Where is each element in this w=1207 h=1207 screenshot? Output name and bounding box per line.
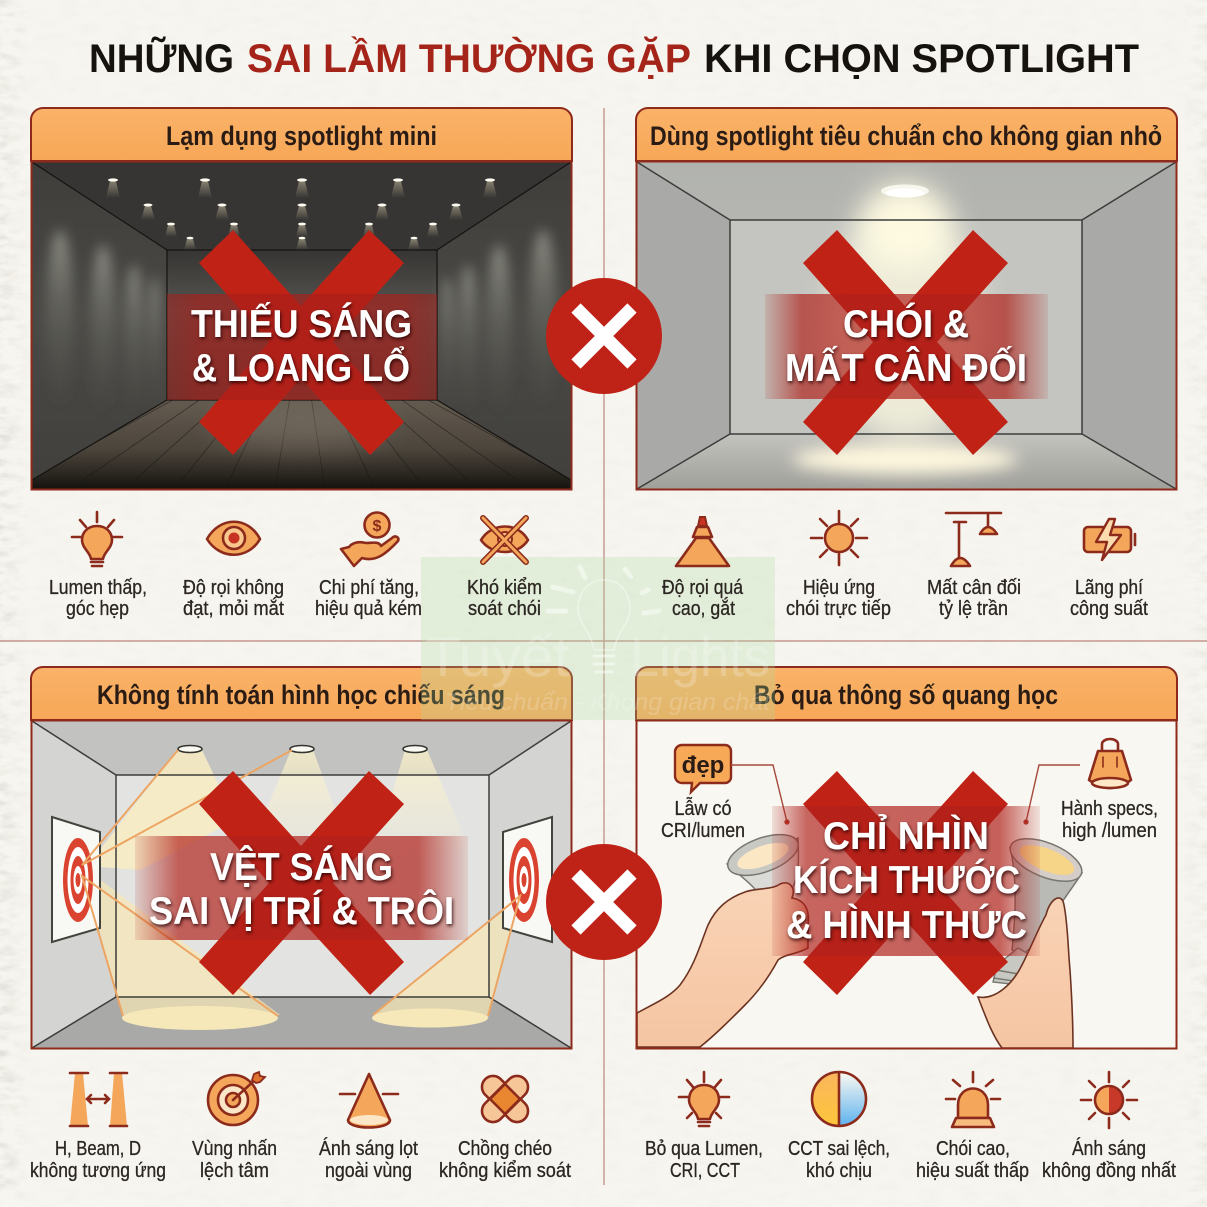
caption: CCT sai lệch: CCT sai lệch, xyxy=(788,1138,890,1160)
caption: Vùng nhấn: lệch tâm xyxy=(200,1160,269,1182)
caption: Lãng phí xyxy=(1070,577,1148,620)
caption: H, Beam, D xyxy=(30,1138,166,1182)
caption: Ánh sáng không đồng nhất: không đồng nhất xyxy=(1042,1160,1176,1182)
icon: pendant lamp xyxy=(1089,739,1131,788)
title: KHI CHỌN SPOTLIGHT xyxy=(704,37,1139,81)
left hand xyxy=(637,883,808,1047)
caption: CCT sai lệch: khó chịu xyxy=(806,1160,872,1182)
title: NHỮNG xyxy=(89,35,234,81)
callout: speech bubble đẹp xyxy=(675,745,731,792)
caption: H, Beam, D: không tương ứng xyxy=(30,1160,166,1182)
icon: H beam D xyxy=(70,1073,127,1126)
caption: Mất cân đối: tỷ lệ trần xyxy=(939,598,1008,620)
overlay band xyxy=(135,836,468,940)
caption: Độ rọi quá cao xyxy=(662,577,744,620)
heading: Lạm dụng spotlight mini xyxy=(31,108,572,161)
icon: target with arrow xyxy=(208,1072,265,1125)
icon row 2: left xyxy=(30,1071,571,1182)
overlay text: THIẾU SÁNG & LOANG LỔ: & LOANG LỔ xyxy=(192,345,410,390)
caption: Chi phí tăng: Chi phí tăng, xyxy=(319,577,419,599)
caption left: Lẫw có xyxy=(674,797,732,820)
caption right xyxy=(1061,798,1158,842)
caption: Ánh sáng lọt: Ánh sáng lọt xyxy=(319,1137,418,1160)
overlay text: VỆT SÁNG / SAI VỊ TRÍ & TRÔI: VỆT SÁNG xyxy=(210,845,393,889)
caption: Hiệu ứng chói xyxy=(786,577,891,620)
ceiling downlights xyxy=(178,746,427,752)
overlay text: THIẾU SÁNG & LOANG LỔ xyxy=(191,302,412,390)
icon: CCT split circle xyxy=(812,1072,866,1126)
overlay text: CHỈ NHÌN KÍCH THƯỚC & HÌNH THỨC xyxy=(786,814,1027,947)
heading: Không tính toán hình học chiếu sáng: Không tính toán hình học chiếu sáng xyxy=(97,680,505,710)
icon: light bulb xyxy=(72,512,122,566)
overlay text: CHÓI & MẤT CÂN ĐỐI: MẤT CÂN ĐỐI xyxy=(785,345,1027,390)
caption: Khó kiểm soát chói: Khó kiểm xyxy=(467,577,542,599)
caption: H, Beam, D: H, Beam, D xyxy=(55,1138,141,1160)
watermark: Lights xyxy=(630,625,770,688)
overlay text: CHÓI & MẤT CÂN ĐỐI: CHÓI & xyxy=(843,302,969,346)
icon: cone with arrows xyxy=(340,1074,398,1128)
overlay text: VỆT SÁNG / SAI VỊ TRÍ & TRÔI xyxy=(149,845,454,933)
caption: CCT sai lệch xyxy=(788,1138,890,1182)
icon row 2: right xyxy=(645,1072,1176,1182)
big red X xyxy=(199,771,404,995)
caption: Bỏ qua Lumen xyxy=(645,1138,763,1182)
caption: Mất cân đối: Mất cân đối xyxy=(927,577,1021,599)
illustration: room with misplaced beams xyxy=(32,721,571,1048)
panel: ignoring optical specs xyxy=(636,667,1177,1048)
watermark: Tiêu chuẩn - Không gian chất xyxy=(445,689,771,716)
icon: battery and bolt xyxy=(1084,519,1135,560)
overlay text: VỆT SÁNG / SAI VỊ TRÍ & TRÔI: SAI VỊ TRÍ & TRÔI xyxy=(149,888,454,933)
right hand xyxy=(978,898,1073,1048)
overlay text: CHỈ NHÌN KÍCH THƯỚC & HÌNH THỨC: & HÌNH THỨC xyxy=(786,903,1027,947)
right bulb xyxy=(993,830,1088,985)
overlay band xyxy=(772,806,1040,956)
caption: Ánh sáng lọt: ngoài vùng xyxy=(325,1160,412,1182)
caption left xyxy=(661,797,745,842)
caption: Ánh sáng không đồng nhất: Ánh sáng xyxy=(1072,1137,1146,1160)
panel: overuse of mini spotlights xyxy=(30,107,573,490)
caption: Vùng nhấn xyxy=(192,1138,277,1182)
icon: beam cone xyxy=(676,517,729,566)
icon: sun xyxy=(811,511,867,565)
icon: coin and hand xyxy=(341,512,398,566)
overlay text: CHỈ NHÌN KÍCH THƯỚC & HÌNH THỨC: KÍCH THƯỚC xyxy=(793,858,1020,902)
caption: Độ rọi không: đạt, mỏi mắt xyxy=(183,597,284,620)
caption: Chói cao: hiệu suất thấp xyxy=(916,1160,1029,1182)
left bulb xyxy=(722,826,804,902)
caption: Độ rọi không: Độ rọi không xyxy=(183,577,284,599)
heading: Không tính toán hình học chiếu sáng xyxy=(31,667,572,720)
icon: eye xyxy=(207,522,260,555)
caption: Ánh sáng lọt xyxy=(319,1137,418,1182)
caption: Chi phí tăng xyxy=(315,577,422,620)
illustration: dark room with small spotlights xyxy=(32,162,570,488)
caption: Bỏ qua Lumen: CRI, CCT xyxy=(670,1160,740,1182)
title xyxy=(89,35,1139,81)
caption: Chồng chéo: Chồng chéo xyxy=(458,1138,552,1160)
icon: coin and hand: $ xyxy=(373,518,382,535)
icon: half lit sun xyxy=(1081,1072,1137,1128)
watermark: Tuyết xyxy=(425,625,570,688)
caption: Khó kiểm soát chói: soát chói xyxy=(468,598,541,620)
big red X xyxy=(803,230,1008,455)
caption: Chồng chéo: không kiểm soát xyxy=(439,1160,571,1182)
heading: Bỏ qua thông số quang học xyxy=(636,667,1177,720)
target on left wall xyxy=(52,817,100,942)
caption: Lãng phí: công suất xyxy=(1070,598,1148,620)
leader lines xyxy=(731,765,1080,824)
icon: crossing bandages xyxy=(477,1071,533,1127)
heading: Bỏ qua thông số quang học: Bỏ qua thông số quang học xyxy=(754,680,1058,710)
target on right wall xyxy=(503,817,552,942)
overlay band xyxy=(765,294,1048,399)
illustration: bright room with strong glare xyxy=(637,162,1176,489)
icon: alarm light xyxy=(946,1072,1000,1127)
caption: Độ rọi quá cao: cao, gắt xyxy=(672,597,735,620)
caption: Chói cao xyxy=(916,1138,1029,1182)
heading: Lạm dụng spotlight mini: Lạm dụng spotlight mini xyxy=(166,121,437,151)
overlay text: THIẾU SÁNG & LOANG LỔ: THIẾU SÁNG xyxy=(191,302,412,346)
caption: Lãng phí: Lãng phí xyxy=(1075,577,1143,599)
big red X xyxy=(803,771,1008,995)
panel: standard spotlight in small space xyxy=(636,108,1177,490)
panel: no lighting geometry calculation xyxy=(31,667,572,1048)
icon: light bulb xyxy=(679,1072,729,1126)
caption right: Hành specs, xyxy=(1061,798,1158,820)
icon: crossed eye xyxy=(481,518,528,562)
icon row 1: right xyxy=(662,511,1148,620)
overlay band xyxy=(167,294,437,400)
watermark xyxy=(421,557,775,720)
heading: Dùng spotlight tiêu chuẩn cho không gian nhỏ xyxy=(636,108,1177,161)
big red X xyxy=(199,230,404,455)
overlay text: CHÓI & MẤT CÂN ĐỐI xyxy=(785,302,1027,390)
caption: Độ rọi không xyxy=(183,577,284,620)
icon: red X circle lower xyxy=(546,844,662,960)
caption left: CRI/lumen xyxy=(661,820,745,842)
caption: Ánh sáng không đồng nhất xyxy=(1042,1137,1176,1182)
icon: red X circle upper xyxy=(546,278,662,394)
caption: Hiệu ứng chói: chói trực tiếp xyxy=(786,598,891,620)
caption: Chồng chéo xyxy=(439,1138,571,1182)
caption: Lumen thấp: Lumen thấp, xyxy=(49,577,147,599)
caption: Khó kiểm soát chói xyxy=(467,577,542,620)
caption: Lumen thấp xyxy=(49,577,147,620)
caption: Vùng nhấn: Vùng nhấn xyxy=(192,1138,277,1160)
icon row 1: left xyxy=(49,512,542,620)
caption: Chói cao: Chói cao, xyxy=(936,1138,1010,1160)
illustration: hands comparing two bulbs xyxy=(637,721,1176,1048)
caption: Mất cân đối xyxy=(927,577,1021,620)
caption: Bỏ qua Lumen: Bỏ qua Lumen, xyxy=(645,1138,763,1160)
caption: Độ rọi quá cao: Độ rọi quá xyxy=(662,577,744,599)
icon: ceiling proportion xyxy=(946,513,1001,566)
caption right: high /lumen xyxy=(1062,820,1157,842)
caption: Hiệu ứng chói: Hiệu ứng xyxy=(803,577,875,599)
caption: Chi phí tăng: hiệu quả kém xyxy=(315,598,422,620)
title: SAI LẦM THƯỜNG GẶP xyxy=(247,35,691,81)
callout: speech bubble đẹp: đẹp xyxy=(682,752,724,779)
overlay text: CHỈ NHÌN KÍCH THƯỚC & HÌNH THỨC: CHỈ NHÌN xyxy=(823,814,989,858)
caption: Lumen thấp: góc hẹp xyxy=(66,598,129,620)
